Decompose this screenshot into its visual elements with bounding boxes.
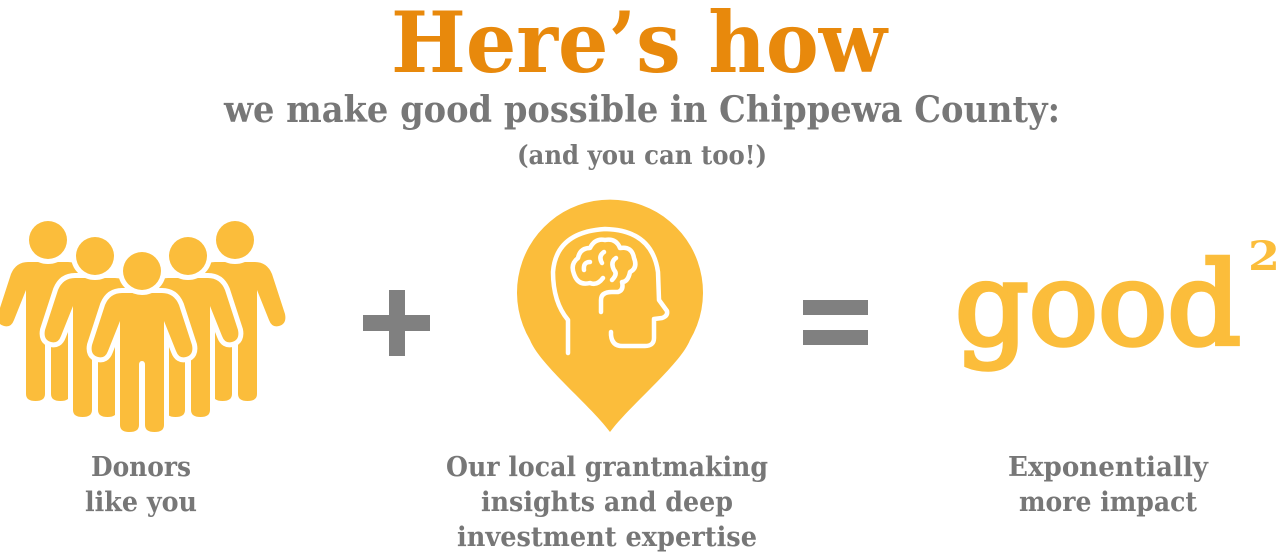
label: insights: insights and deep — [481, 487, 733, 518]
good squared: good — [955, 238, 1241, 371]
label: insights: Our local grantmaking — [446, 452, 768, 483]
icon: equals — [803, 300, 868, 345]
label: impact: Exponentially — [1008, 452, 1209, 483]
icon: pin with head and brain — [517, 200, 703, 432]
label: impact — [1008, 452, 1209, 518]
label: donors: like you — [85, 487, 197, 518]
icon: group of people — [0, 221, 285, 432]
label: insights — [446, 452, 768, 553]
label: donors — [85, 452, 197, 518]
label: insights: investment expertise — [457, 522, 757, 553]
good squared: 2 — [1248, 233, 1280, 280]
subtitle: we make good possible in Chippewa County: — [223, 89, 1060, 131]
label: impact: more impact — [1019, 487, 1197, 518]
sub-subtitle: (and you can too!) — [517, 141, 767, 171]
icon: plus — [363, 290, 430, 356]
label: donors: Donors — [91, 452, 191, 483]
